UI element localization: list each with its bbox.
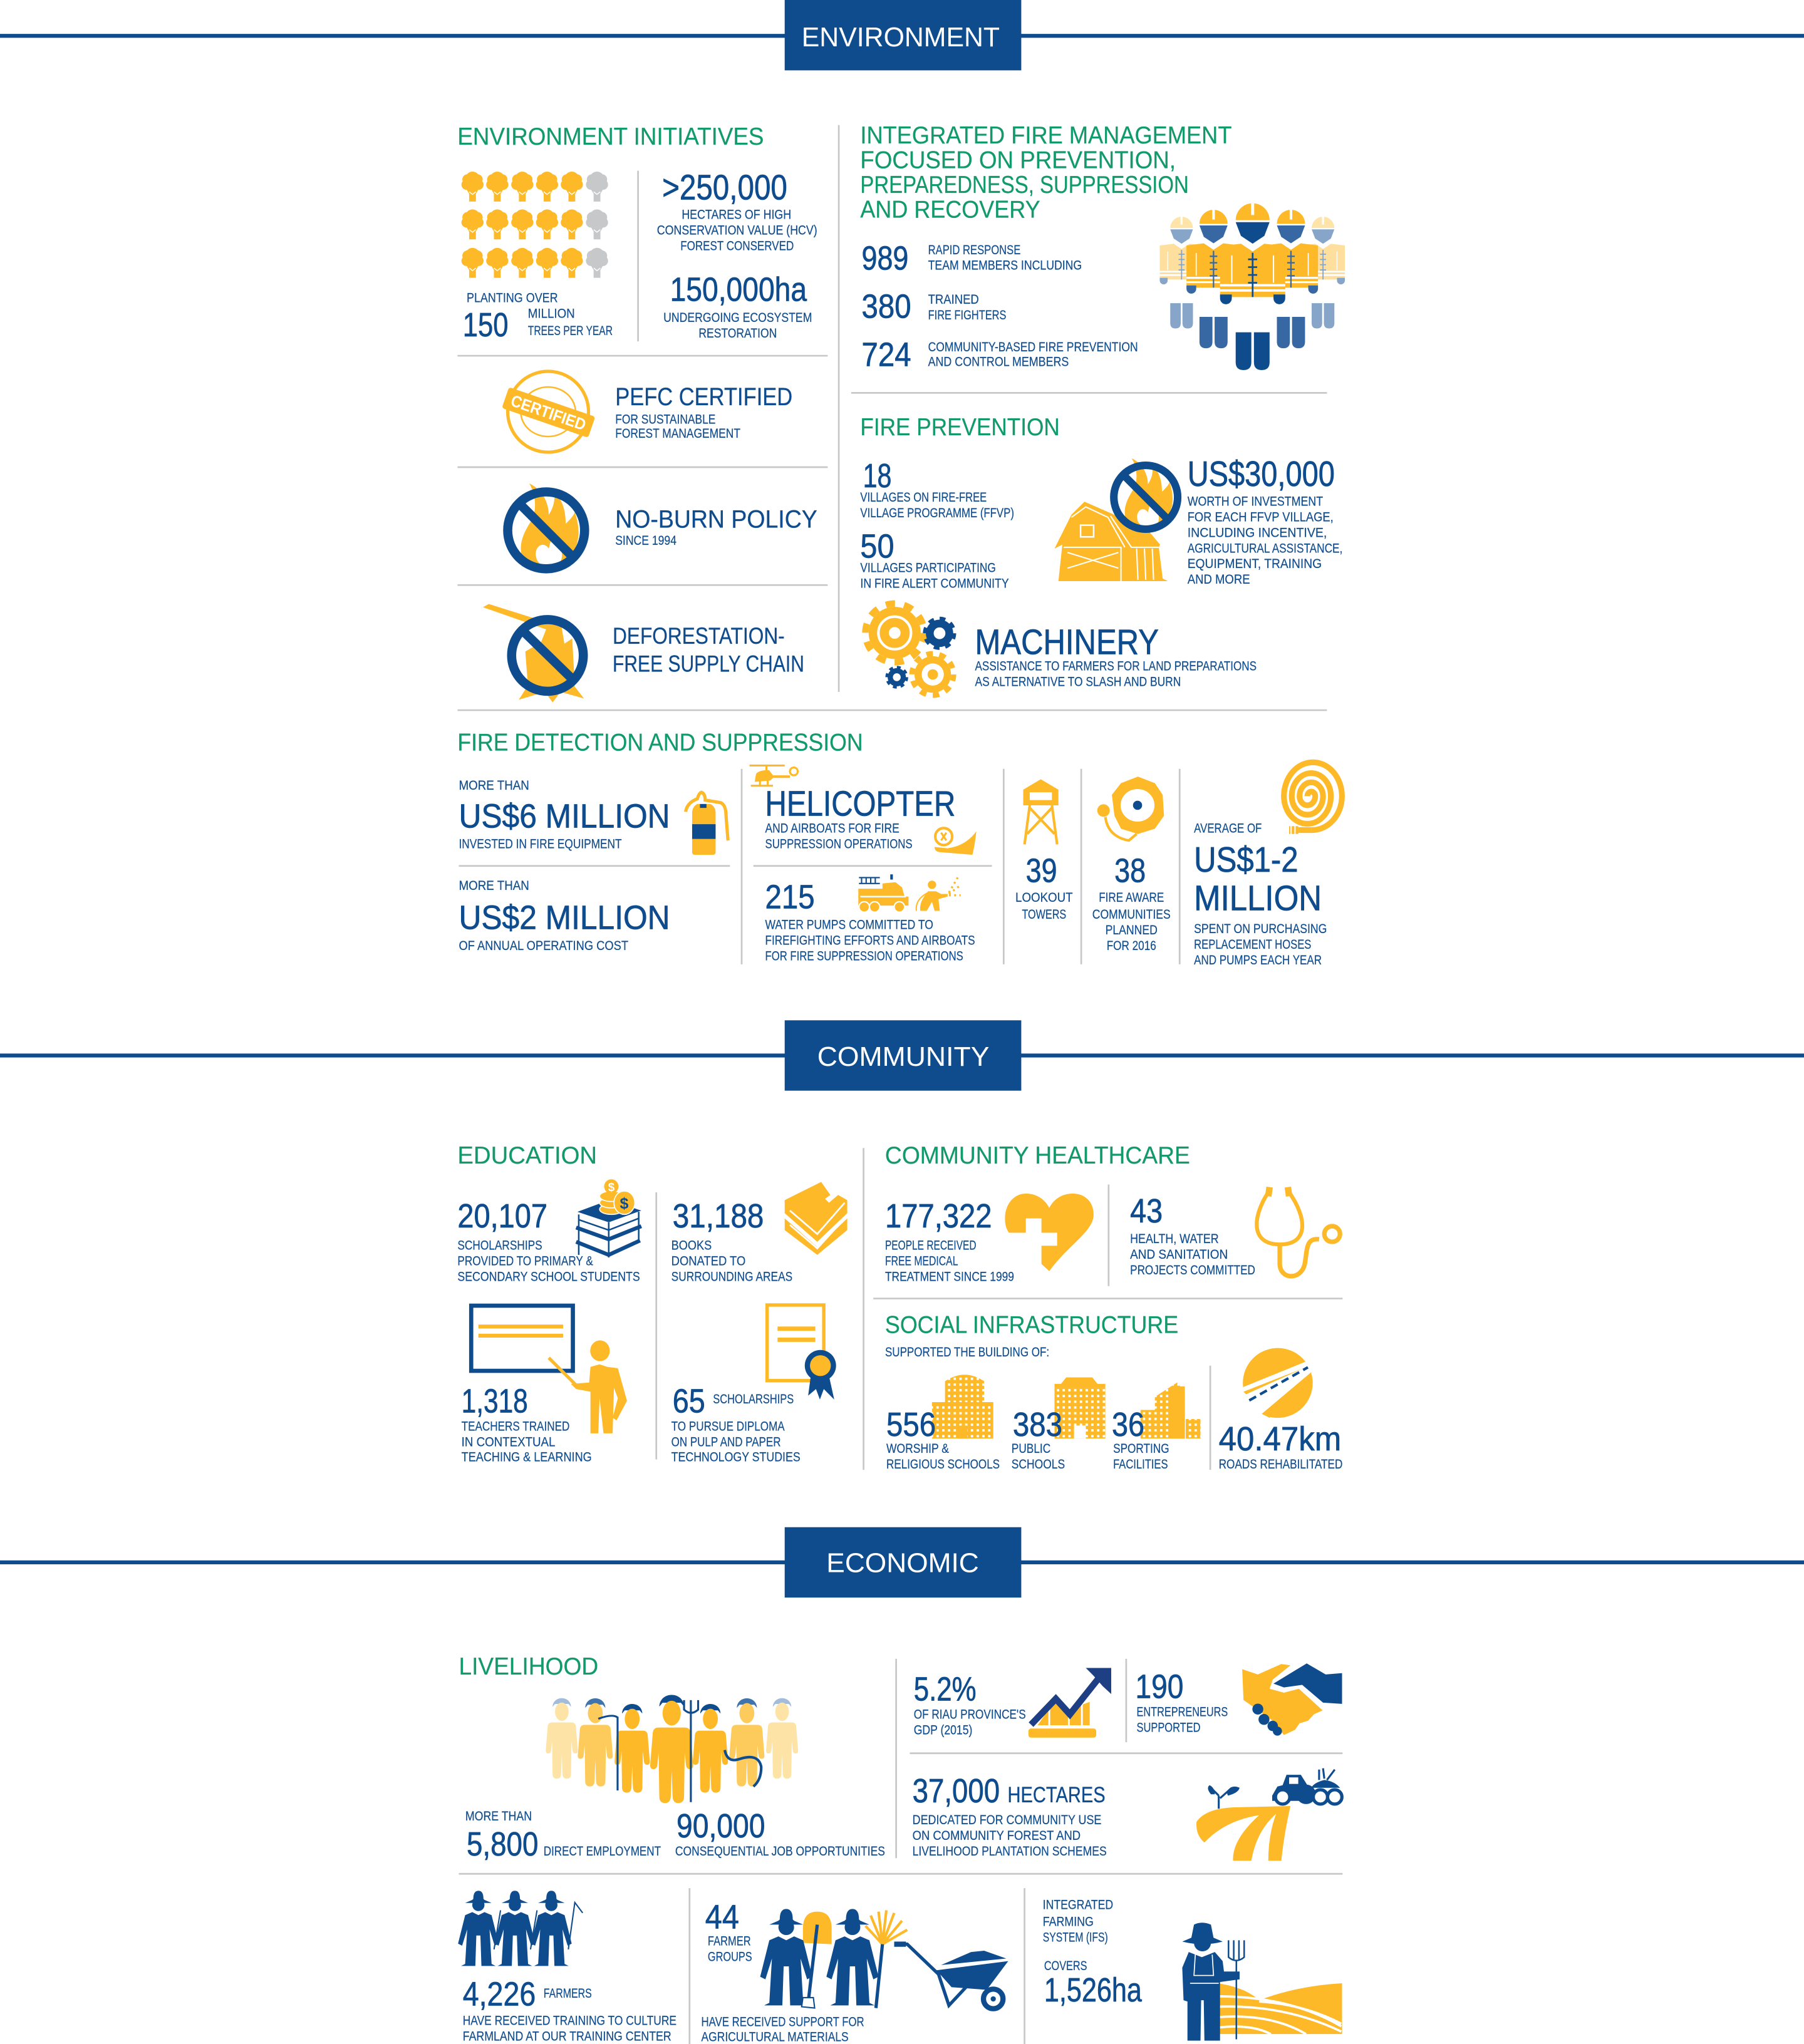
stat: 556 worship and religious schools: 556 <box>886 1406 936 1443</box>
stat: 380: FIRE FIGHTERS <box>928 308 1006 323</box>
stat: 380 <box>861 288 1006 326</box>
stat: 20,107 scholarships: SCHOLARSHIPS <box>457 1239 542 1253</box>
heading: social infrastructure: SOCIAL INFRASTRUCTURE <box>885 1312 1178 1339</box>
stat: 4,226 farmers: 4,226 <box>463 1975 536 2013</box>
stat: us$6 million: INVESTED IN FIRE EQUIPMENT <box>459 837 622 852</box>
stat: 383 public schools <box>1012 1406 1065 1472</box>
icon: rows of trees <box>462 172 608 278</box>
stat: 36 sporting facilities: FACILITIES <box>1113 1457 1168 1472</box>
stat: 37,000 hectares: HECTARES <box>1008 1783 1106 1807</box>
stat: us$1-2 million: SPENT ON PURCHASING <box>1194 922 1327 936</box>
text: received support <box>702 2015 864 2044</box>
heading: fire prevention: FIRE PREVENTION <box>860 414 1060 441</box>
stat: us$30,000: US$30,000 <box>1188 454 1335 493</box>
chart: growth arrow <box>1029 1668 1111 1738</box>
stat: 1,526ha ifs: 1,526ha <box>1044 1971 1143 2009</box>
stat: 31,188 books: 31,188 <box>673 1197 764 1235</box>
stat: 250,000 hectares <box>657 167 817 254</box>
stat: 1,318 teachers: IN CONTEXTUAL <box>462 1435 555 1450</box>
stat: us$2 million <box>459 879 670 953</box>
stat: machinery: AS ALTERNATIVE TO SLASH AND BURN <box>975 675 1181 689</box>
text: received support: HAVE RECEIVED SUPPORT FOR <box>702 2015 864 2030</box>
stat: us$30,000: EQUIPMENT, TRAINING <box>1188 557 1322 571</box>
stat: 43 projects: HEALTH, WATER <box>1130 1232 1219 1246</box>
panel: environment initiatives <box>457 123 827 703</box>
stat: 1,318 teachers <box>462 1383 592 1465</box>
stat: us$1-2 million: US$1-2 <box>1194 840 1299 879</box>
stat: 65 scholarships: TECHNOLOGY STUDIES <box>671 1450 801 1465</box>
stat: 250,000 hectares: FOREST CONSERVED <box>680 239 794 254</box>
stat: machinery <box>975 622 1257 689</box>
icon: no burning <box>508 483 584 569</box>
stat: 250,000 hectares: CONSERVATION VALUE (HCV) <box>657 224 817 238</box>
stat: 250,000 hectares: HECTARES OF HIGH <box>682 208 791 222</box>
stat: us$30,000: INCLUDING INCENTIVE, <box>1188 525 1327 540</box>
panel: education <box>457 1142 848 1465</box>
stat: 5.2% gdp <box>914 1670 1026 1738</box>
icon: books and coins <box>576 1179 641 1257</box>
icon: teacher at whiteboard <box>471 1306 627 1433</box>
panel: farmer groups <box>702 1899 1009 2044</box>
stat: 18 villages: 18 <box>863 457 891 495</box>
heading: education: EDUCATION <box>457 1142 597 1169</box>
stat: us$2 million: MORE THAN <box>459 879 529 893</box>
stat: 39 lookout towers: 39 <box>1026 852 1057 890</box>
text: pefc certified: PEFC CERTIFIED <box>615 383 792 411</box>
heading: integrated fire management: INTEGRATED FIRE MANAGEMENT <box>860 122 1231 149</box>
stat: us$6 million <box>459 778 670 852</box>
stat: 37,000 hectares: DEDICATED FOR COMMUNITY USE <box>913 1813 1101 1827</box>
icon: farmer and field <box>1182 1923 1342 2041</box>
icon: heart with cross <box>1005 1194 1094 1271</box>
section banner: community: COMMUNITY <box>817 1041 989 1072</box>
icon: no fire <box>1114 458 1178 529</box>
stat: us$6 million: MORE THAN <box>459 778 529 793</box>
text: received support: AGRICULTURAL MATERIALS <box>702 2030 849 2044</box>
icon: certified stamp: CERTIFIED <box>509 391 589 434</box>
icon: barn <box>1054 502 1168 581</box>
stat: 38 fire aware communities: FIRE AWARE <box>1099 890 1164 905</box>
stat: 50 villages: VILLAGES PARTICIPATING <box>860 560 996 575</box>
stat: 37,000 hectares: LIVELIHOOD PLANTATION SCHEMES <box>913 1844 1107 1859</box>
heading: livelihood: LIVELIHOOD <box>459 1653 598 1680</box>
icon: fire extinguisher <box>686 792 728 855</box>
stat: 177,322 people: PEOPLE RECEIVED <box>885 1239 977 1253</box>
icon: three farmers <box>458 1891 583 1966</box>
stat: 50 villages: 50 <box>860 528 894 565</box>
icon: helicopter <box>750 765 798 786</box>
panel: farmers training <box>458 1891 676 2044</box>
stat: 65 scholarships: 65 <box>673 1383 705 1420</box>
stat: 383 public schools: 383 <box>1013 1406 1062 1443</box>
stat: helicopter <box>765 784 955 852</box>
stat: 150 million trees: PLANTING OVER <box>467 291 558 306</box>
text: pefc certified: FOREST MANAGEMENT <box>615 426 740 441</box>
stat: 150,000ha: RESTORATION <box>698 326 777 341</box>
stat: 4,226 farmers: HAVE RECEIVED TRAINING TO CULTURE <box>463 2014 676 2028</box>
stat: 383 public schools: SCHOOLS <box>1012 1457 1065 1472</box>
icon: fireman with hose <box>916 877 961 911</box>
stat: 65 scholarships <box>671 1383 801 1465</box>
stat: 1,526ha ifs: INTEGRATED <box>1043 1897 1113 1912</box>
stat: 39 lookout towers: TOWERS <box>1022 907 1066 922</box>
stat: 18 villages: VILLAGES ON FIRE-FREE <box>860 490 987 505</box>
stat: 31,188 books: SURROUNDING AREAS <box>671 1269 792 1284</box>
stat: 177,322 people: FREE MEDICAL <box>885 1254 958 1268</box>
stat: 43 projects <box>1130 1192 1255 1278</box>
icon: certified stamp <box>502 371 595 452</box>
icon: row of workers <box>546 1695 798 1803</box>
stat: 150 million trees <box>463 291 613 344</box>
stat: helicopter: HELICOPTER <box>765 784 955 823</box>
stat: 177,322 people: TREATMENT SINCE 1999 <box>885 1269 1014 1284</box>
heading: environment initiatives: ENVIRONMENT INITIATIVES <box>457 123 764 150</box>
stat: 65 scholarships: ON PULP AND PAPER <box>671 1435 780 1450</box>
stat: 38 fire aware communities: PLANNED <box>1106 923 1158 937</box>
icon: stack of books <box>785 1182 848 1255</box>
stat: 20,107 scholarships: PROVIDED TO PRIMARY & <box>457 1254 593 1268</box>
stat: 65 scholarships: TO PURSUE DIPLOMA <box>671 1420 785 1434</box>
heading: integrated fire management: AND RECOVERY <box>860 197 1040 223</box>
icon: handshake <box>1242 1663 1342 1736</box>
stat: 39 lookout towers <box>1015 852 1073 922</box>
stat: 989: TEAM MEMBERS INCLUDING <box>928 259 1082 273</box>
heading: fire detection and suppression: FIRE DETECTION AND SUPPRESSION <box>457 730 863 756</box>
icon: books and coins: $ <box>608 1180 615 1194</box>
stat: helicopter: SUPPRESSION OPERATIONS <box>765 837 913 852</box>
stat: 36 sporting facilities: 36 <box>1112 1406 1144 1443</box>
stat: 43 projects: AND SANITATION <box>1130 1247 1228 1262</box>
stat: 31,188 books: BOOKS <box>671 1239 712 1253</box>
stat: us$1-2 million: AND PUMPS EACH YEAR <box>1194 953 1322 968</box>
stat: us$1-2 million: REPLACEMENT HOSES <box>1194 937 1311 952</box>
panel: economic contribution <box>910 1659 1342 1861</box>
icon: airboat <box>935 828 977 855</box>
stat: 5.2% gdp: GDP (2015) <box>914 1723 972 1738</box>
panel: fire detection and suppression <box>457 730 1342 968</box>
stat: us$1-2 million: AVERAGE OF <box>1194 822 1262 836</box>
stat: 215 water pumps: 215 <box>765 878 815 916</box>
stat: 44 farmer groups: FARMER <box>708 1934 751 1949</box>
section banner: environment: ENVIRONMENT <box>802 22 1000 53</box>
stat: 150,000ha <box>663 271 812 341</box>
panel: integrated farming system <box>1043 1897 1342 2041</box>
stat: 1,526ha ifs: COVERS <box>1044 1959 1087 1973</box>
icon: books and coins: $ <box>619 1195 628 1212</box>
panel: social infrastructure <box>885 1312 1342 1472</box>
stat: 724 <box>861 336 1138 374</box>
section banner: environment <box>0 0 1804 70</box>
stat: 989 <box>861 240 1082 277</box>
stat: 50 villages: IN FIRE ALERT COMMUNITY <box>860 576 1009 591</box>
stat: 380: TRAINED <box>928 292 979 307</box>
stat: 215 water pumps: FIREFIGHTING EFFORTS AND AIRBOATS <box>765 934 975 948</box>
stat: 250,000 hectares: >250,000 <box>662 167 787 207</box>
stat: 556 worship and religious schools: WORSHIP & <box>886 1442 949 1456</box>
stat: 556 worship and religious schools <box>886 1406 1000 1472</box>
icon: wheelbarrow <box>894 1941 1009 2009</box>
stat: 989: 989 <box>861 240 908 277</box>
text: no-burn policy: SINCE 1994 <box>615 534 676 548</box>
heading: community healthcare: COMMUNITY HEALTHCARE <box>885 1142 1190 1169</box>
stat: 31,188 books <box>671 1197 792 1284</box>
panel: integrated fire management <box>851 122 1345 393</box>
stat: 37,000 hectares <box>913 1772 1107 1859</box>
stat: 90,000 job opportunities: 90,000 <box>676 1807 765 1845</box>
stat: 40.47km roads: 40.47km <box>1219 1420 1341 1458</box>
stat: 150 million trees: MILLION <box>528 307 575 321</box>
stat: 40.47km roads: ROADS REHABILITATED <box>1219 1457 1342 1472</box>
stat: 4,226 farmers: FARMERS <box>544 1986 592 2001</box>
stat: 65 scholarships: SCHOLARSHIPS <box>713 1392 794 1407</box>
icon: sporting facility <box>1141 1383 1201 1438</box>
icon: public school building <box>1054 1377 1106 1438</box>
stat: 1,526ha ifs: FARMING <box>1043 1914 1094 1929</box>
stat: 724: 724 <box>861 336 911 374</box>
stat: 36 sporting facilities: SPORTING <box>1113 1442 1169 1456</box>
icon: road <box>1238 1348 1317 1420</box>
stat: 190 entrepreneurs: ENTREPRENEURS <box>1137 1705 1228 1719</box>
stat: 556 worship and religious schools: RELIGIOUS SCHOOLS <box>886 1457 1000 1472</box>
icon: firefighters <box>1160 204 1345 370</box>
stat: 38 fire aware communities <box>1092 852 1171 953</box>
stat: 724: COMMUNITY-BASED FIRE PREVENTION <box>928 340 1138 354</box>
icon: lookout tower <box>1024 779 1059 844</box>
stat: us$30,000: AGRICULTURAL ASSISTANCE, <box>1188 541 1342 555</box>
stat: 18 villages: VILLAGE PROGRAMME (FFVP) <box>860 506 1014 520</box>
panel: livelihood <box>459 1653 885 1863</box>
stat: 31,188 books: DONATED TO <box>671 1254 745 1268</box>
stat: 150,000ha: 150,000ha <box>670 271 807 309</box>
stat: 150,000ha: UNDERGOING ECOSYSTEM <box>663 311 812 325</box>
panel: fire prevention <box>860 414 1342 695</box>
text: deforestation-free supply chain: DEFORESTATION- <box>613 622 785 649</box>
stat: 38 fire aware communities: FOR 2016 <box>1107 939 1156 953</box>
stat: us$30,000: FOR EACH FFVP VILLAGE, <box>1188 510 1334 524</box>
stat: 38 fire aware communities: COMMUNITIES <box>1092 907 1171 922</box>
stat: machinery: ASSISTANCE TO FARMERS FOR LAND PREPARATIONS <box>975 659 1257 674</box>
stat: 190 entrepreneurs: SUPPORTED <box>1137 1720 1201 1735</box>
icon: field with plant and truck <box>1196 1768 1342 1861</box>
text: no-burn policy <box>615 506 817 548</box>
heading: integrated fire management: FOCUSED ON PREVENTION, <box>860 147 1176 173</box>
stat: us$2 million: US$2 MILLION <box>459 899 670 937</box>
stat: 1,318 teachers: 1,318 <box>462 1383 528 1420</box>
text: deforestation-free supply chain <box>613 622 804 677</box>
stat: 20,107 scholarships <box>457 1197 640 1284</box>
stat: 20,107 scholarships: SECONDARY SCHOOL STUDENTS <box>457 1269 640 1284</box>
stat: 380: 380 <box>861 288 911 326</box>
text: no-burn policy: NO-BURN POLICY <box>615 506 817 534</box>
stat: 37,000 hectares: ON COMMUNITY FOREST AND <box>913 1829 1081 1843</box>
section banner: community <box>0 1020 1804 1091</box>
stat: 1,318 teachers: TEACHERS TRAINED <box>462 1420 569 1434</box>
stat: us$6 million: US$6 MILLION <box>459 797 670 835</box>
stat: 90,000 job opportunities: CONSEQUENTIAL JOB OPPORTUNITIES <box>675 1844 885 1859</box>
stat: 18 villages <box>860 457 1014 520</box>
text: supported the building of: SUPPORTED THE BUILDING OF: <box>885 1345 1049 1360</box>
stat: 215 water pumps: FOR FIRE SUPPRESSION OPERATIONS <box>765 949 963 964</box>
stat: us$30,000 <box>1188 454 1342 587</box>
text: pefc certified: FOR SUSTAINABLE <box>615 412 715 426</box>
icon: no deforestation <box>483 604 584 703</box>
stat: 215 water pumps: WATER PUMPS COMMITTED TO <box>765 918 933 932</box>
stat: 5,800 direct employment: DIRECT EMPLOYMENT <box>544 1844 661 1859</box>
panel: community healthcare <box>873 1142 1342 1299</box>
text: deforestation-free supply chain: FREE SUPPLY CHAIN <box>613 651 804 677</box>
stat: 5,800 direct employment: 5,800 <box>467 1825 538 1863</box>
icon: fire alarm bell <box>1097 777 1164 840</box>
stat: 38 fire aware communities: 38 <box>1114 852 1146 890</box>
text: pefc certified <box>615 383 792 441</box>
stat: us$1-2 million: MILLION <box>1194 878 1322 917</box>
stat: 177,322 people <box>885 1197 1014 1284</box>
stat: 1,526ha ifs <box>1043 1897 1143 2009</box>
stat: 44 farmer groups: GROUPS <box>708 1950 752 1964</box>
heading: integrated fire management <box>860 122 1231 223</box>
stat: 190 entrepreneurs <box>1135 1668 1228 1735</box>
stat: 20,107 scholarships: 20,107 <box>457 1197 547 1235</box>
icon: fire hose <box>1284 762 1342 830</box>
stat: 39 lookout towers: LOOKOUT <box>1015 890 1073 905</box>
stat: 4,226 farmers: FARMLAND AT OUR TRAINING CENTER <box>463 2030 671 2044</box>
section banner: economic: ECONOMIC <box>826 1548 979 1579</box>
stat: 50 villages <box>860 528 1009 591</box>
stat: 37,000 hectares: 37,000 <box>913 1772 1000 1810</box>
stat: 4,226 farmers <box>463 1975 676 2044</box>
icon: gears <box>866 604 954 695</box>
stat: 177,322 people: 177,322 <box>885 1197 992 1235</box>
stat: 43 projects: PROJECTS COMMITTED <box>1130 1263 1255 1278</box>
heading: integrated fire management: PREPAREDNESS, SUPPRESSION <box>860 172 1189 199</box>
stat: 989: RAPID RESPONSE <box>928 243 1020 257</box>
stat: 43 projects: 43 <box>1130 1192 1163 1230</box>
stat: 5.2% gdp: OF RIAU PROVINCE'S <box>914 1708 1026 1722</box>
section banner: economic <box>0 1527 1804 1598</box>
stat: helicopter: AND AIRBOATS FOR FIRE <box>765 822 899 836</box>
stat: 150 million trees: 150 <box>463 306 509 344</box>
stat: 5.2% gdp: 5.2% <box>914 1670 977 1708</box>
stat: 1,318 teachers: TEACHING & LEARNING <box>462 1450 592 1465</box>
stat: 215 water pumps <box>765 878 975 964</box>
stat: 150 million trees: TREES PER YEAR <box>528 324 613 338</box>
stat: 44 farmer groups: 44 <box>705 1899 739 1936</box>
icon: fire truck <box>858 874 908 912</box>
stat: us$2 million: OF ANNUAL OPERATING COST <box>459 939 628 953</box>
icon: farmers with shovel and broom <box>760 1909 907 2008</box>
stat: 383 public schools: PUBLIC <box>1012 1442 1050 1456</box>
stat: 36 sporting facilities <box>1112 1406 1169 1472</box>
stat: us$1-2 million <box>1194 822 1327 968</box>
stat: 724: AND CONTROL MEMBERS <box>928 355 1069 369</box>
icon: worship building <box>932 1375 993 1438</box>
stat: 44 farmer groups <box>705 1899 752 1964</box>
stat: us$30,000: AND MORE <box>1188 572 1250 587</box>
icon: stethoscope <box>1257 1187 1340 1276</box>
stat: 5,800 direct employment: MORE THAN <box>465 1809 532 1824</box>
stat: machinery: MACHINERY <box>975 622 1159 662</box>
stat: 1,526ha ifs: SYSTEM (IFS) <box>1043 1930 1108 1944</box>
icon: diploma with ribbon <box>767 1305 836 1400</box>
stat: us$30,000: WORTH OF INVESTMENT <box>1188 494 1323 508</box>
stat: 190 entrepreneurs: 190 <box>1135 1668 1183 1705</box>
stat: 90,000 job opportunities <box>675 1807 885 1859</box>
stat: 5,800 direct employment <box>465 1809 661 1863</box>
